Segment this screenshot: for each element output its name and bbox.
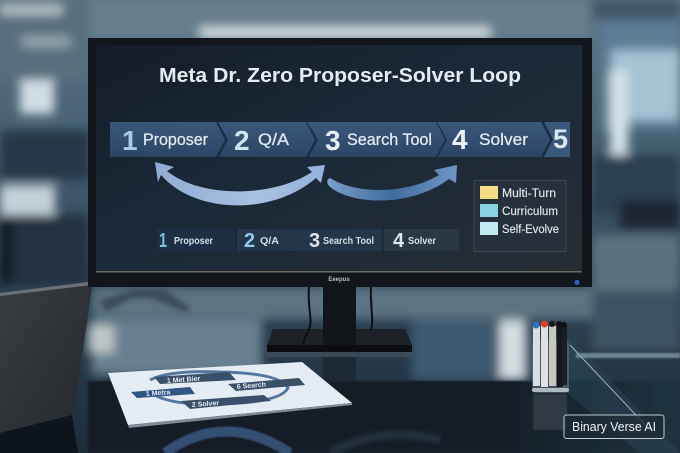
pen cup — [532, 320, 569, 430]
monitor bezel — [88, 38, 592, 287]
arrow: Search Tool to Solver — [327, 165, 457, 201]
segment 5: 5 — [553, 124, 568, 154]
segment 3: Search Tool: Search Tool — [347, 131, 432, 149]
monitor — [88, 38, 592, 287]
segment 3: Search Tool: 3 — [325, 125, 341, 156]
paper step: Solver: 2 Solver — [192, 400, 220, 409]
brand label: Eeepus — [328, 277, 350, 283]
step 4: Solver — [384, 229, 459, 252]
watermark: Binary Verse AI: Binary Verse AI — [572, 420, 656, 434]
paper on desk — [108, 362, 352, 428]
step 1: Proposer — [157, 229, 235, 252]
segment 2: Q/A — [218, 122, 315, 157]
legend — [474, 180, 566, 252]
laptop — [0, 282, 92, 453]
monitor screen — [96, 45, 582, 271]
step 3: Search Tool: 3 — [309, 230, 320, 252]
lower step strip — [157, 229, 459, 252]
paper step: Metra — [131, 387, 195, 398]
monitor stand — [267, 285, 412, 381]
paper step: Metra: 1 Metra — [146, 389, 171, 398]
segment 1: Proposer: Proposer — [143, 131, 208, 149]
step 3: Search Tool — [302, 229, 382, 252]
arrow: Proposer to Search Tool, double-headed — [155, 162, 325, 205]
paper step: Met Bier — [154, 372, 236, 385]
segment 2: Q/A: 2 — [234, 125, 250, 156]
title: Meta Dr. Zero Proposer-Solver Loop — [159, 64, 521, 87]
segment 3: Search Tool — [307, 122, 445, 157]
legend: Curriculum: Curriculum — [502, 206, 558, 218]
segment 4: Solver: Solver — [479, 131, 529, 149]
paper step: Search — [228, 378, 305, 391]
segment 2: Q/A: Q/A — [258, 131, 289, 149]
step 2: Q/A: Q/A — [260, 235, 279, 247]
legend: Multi-Turn: Multi-Turn — [502, 188, 556, 200]
step 2: Q/A: 2 — [244, 230, 255, 252]
step 4: Solver: Solver — [408, 235, 436, 247]
paper step: Search: 6 Search — [237, 381, 266, 391]
glass desk surface — [88, 318, 680, 453]
paper step: Met Bier: 1 Met Bier — [167, 376, 201, 385]
pens — [532, 320, 567, 387]
chevron process bar — [110, 122, 570, 157]
step 4: Solver: 4 — [393, 230, 405, 252]
segment 4: Solver: 4 — [452, 124, 468, 155]
power LED — [574, 280, 580, 285]
step 2: Q/A — [237, 229, 302, 252]
segment 4: Solver — [437, 122, 550, 157]
legend: Self-Evolve: Self-Evolve — [502, 224, 559, 236]
segment 1: Proposer — [110, 122, 225, 157]
segment 1: Proposer: 1 — [122, 125, 138, 156]
paper step: Solver — [181, 395, 271, 409]
watermark: Binary Verse AI — [564, 415, 664, 438]
step 3: Search Tool: Search Tool — [323, 235, 374, 247]
step 1: Proposer: Proposer — [174, 235, 213, 247]
step 1: Proposer: 1 — [159, 230, 167, 252]
chevron bar base — [110, 122, 570, 157]
segment 5 — [544, 122, 570, 157]
